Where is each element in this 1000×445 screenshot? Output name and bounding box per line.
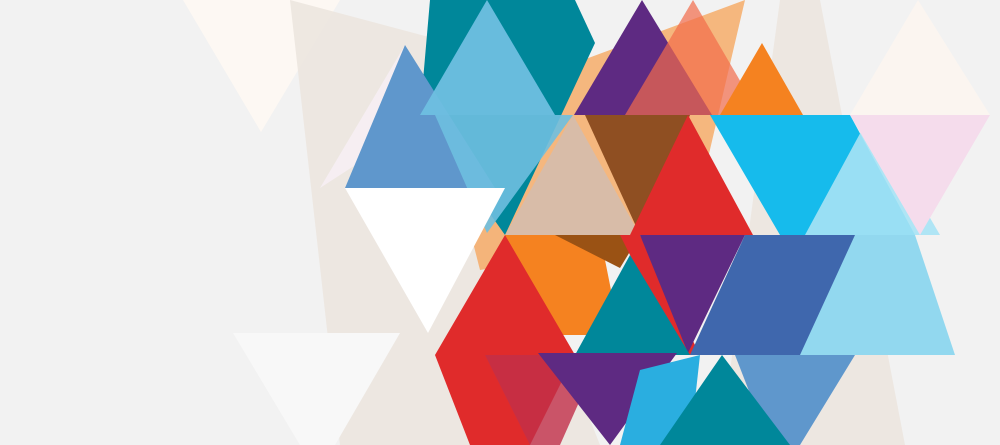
top center triangles	[574, 0, 803, 115]
right cluster triangles	[620, 0, 990, 355]
left cluster triangles	[345, 0, 745, 445]
bottom triangles	[538, 255, 855, 445]
faint background shapes	[183, 0, 905, 445]
